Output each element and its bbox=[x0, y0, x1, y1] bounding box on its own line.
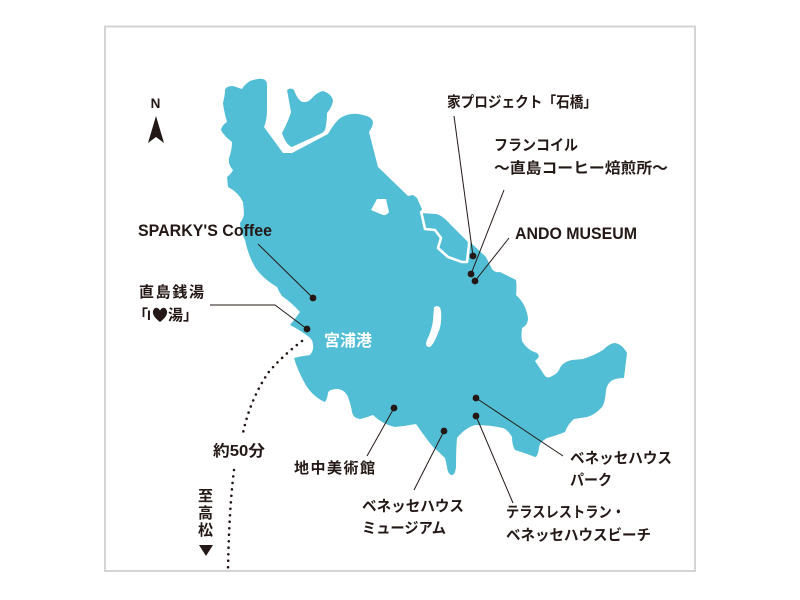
label: 至高松 with direction arrow bbox=[198, 488, 213, 556]
island main body bbox=[221, 79, 627, 475]
map: Naoshima island bbox=[221, 79, 627, 475]
inland pond: centre bbox=[426, 306, 441, 347]
label: フランコイル 直島コーヒー焙煎所: ～直島コーヒー焙煎所～ bbox=[494, 159, 668, 177]
label: フランコイル 直島コーヒー焙煎所 bbox=[494, 137, 668, 177]
inland pond: north bbox=[371, 199, 389, 215]
label: テラスレストラン・ベネッセハウスビーチ: テラスレストラン・ bbox=[506, 504, 625, 521]
label: 家プロジェクト「石橋」: 家プロジェクト「石橋」 bbox=[447, 93, 597, 111]
small northern island bbox=[282, 88, 333, 147]
label: 直島銭湯「I♥湯」: 直島銭湯 bbox=[139, 283, 204, 301]
north arrow: N bbox=[151, 96, 160, 111]
label: ベネッセハウス ミュージアム: ベネッセハウス bbox=[362, 498, 464, 515]
ferry route dotted line bbox=[228, 341, 302, 570]
label: 至高松 with direction arrow: 松 bbox=[198, 522, 213, 539]
label: ベネッセハウス パーク: パーク bbox=[570, 472, 612, 489]
canal inlet bbox=[421, 211, 469, 262]
label: ベネッセハウス ミュージアム: ミュージアム bbox=[362, 520, 446, 537]
label: テラスレストラン・ベネッセハウスビーチ: ベネッセハウスビーチ bbox=[506, 526, 651, 544]
label: フランコイル 直島コーヒー焙煎所: フランコイル bbox=[494, 137, 578, 154]
label: テラスレストラン・ベネッセハウスビーチ bbox=[506, 504, 651, 544]
label: 直島銭湯「I♥湯」: 湯」 bbox=[168, 307, 198, 324]
north arrow bbox=[148, 96, 164, 143]
leader lines and location dots bbox=[210, 116, 563, 503]
label: 直島銭湯「I♥湯」: 「 bbox=[133, 307, 148, 324]
label: 地中美術館: 地中美術館 bbox=[294, 459, 375, 477]
label: 宮浦港: 宮浦港 bbox=[324, 331, 372, 350]
label: 直島銭湯「I♥湯」: I bbox=[147, 307, 151, 323]
label: 約50分: 約50分 bbox=[213, 442, 266, 460]
label: ANDO MUSEUM: ANDO MUSEUM bbox=[515, 225, 637, 243]
label: 至高松 with direction arrow: 高 bbox=[198, 505, 213, 522]
label: 至高松 with direction arrow: 至 bbox=[198, 488, 213, 505]
label: SPARKY'S Coffee: SPARKY'S Coffee bbox=[138, 222, 272, 240]
label: ベネッセハウス パーク bbox=[570, 450, 672, 489]
label: 直島銭湯「I♥湯」 bbox=[133, 283, 204, 324]
label: ベネッセハウス ミュージアム bbox=[362, 498, 464, 537]
label: ベネッセハウス パーク: ベネッセハウス bbox=[570, 450, 672, 467]
